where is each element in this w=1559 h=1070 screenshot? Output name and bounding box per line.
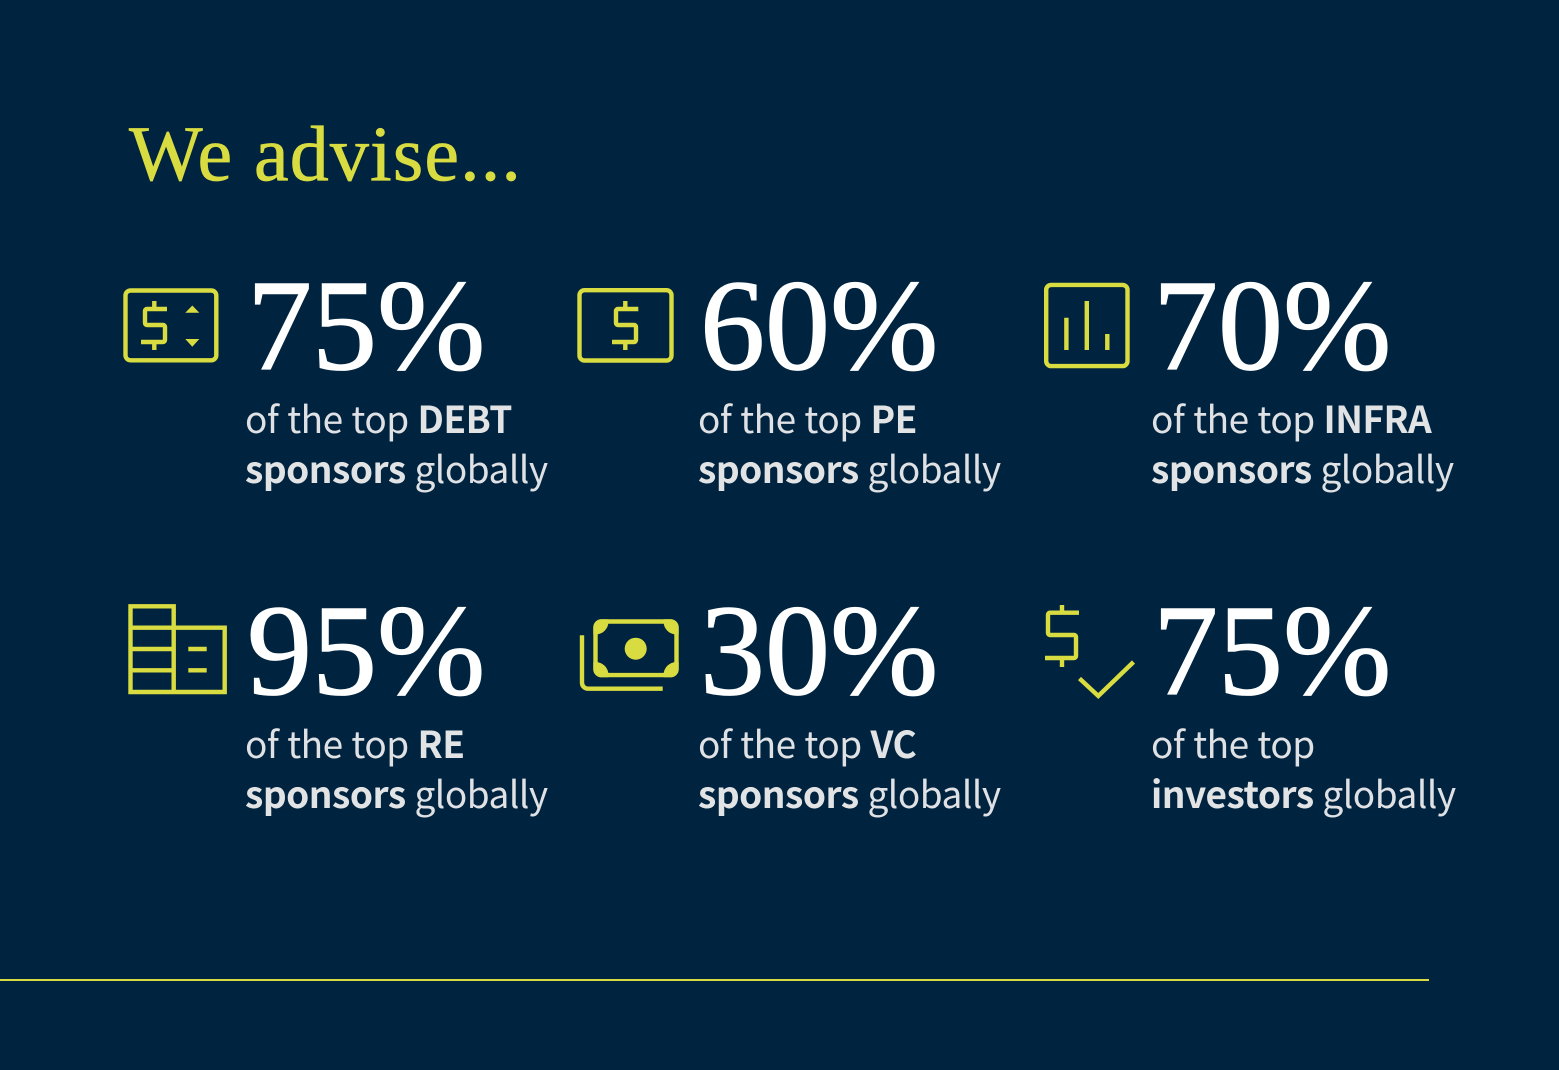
stat: 30% VC sponsors [698,579,1001,819]
stat description: PE: sponsors globally [698,440,1001,494]
icon: dollar with up and down arrows [126,290,216,360]
stat: 70% infra sponsors [1151,254,1454,494]
icon: dollar with check mark [1045,605,1134,696]
stat description: investors: of the top [1151,715,1315,769]
stat: 95% RE sponsors [245,579,548,819]
stat description: debt: of the top DEBT [245,390,512,444]
stat value: 70%: 70% [1153,254,1391,398]
icon: bar chart [1046,285,1128,366]
stat description: debt [245,390,548,494]
stat value: 75%: 75% [247,254,485,398]
stat value: 75%: 75% [1153,579,1391,723]
stat: 75% debt sponsors [245,254,548,494]
stat description: PE: of the top PE [698,390,917,444]
stat: 75% investors [1151,579,1456,819]
stat description: RE: of the top RE [245,715,464,769]
title: We advise... [129,110,522,197]
stat description: PE [698,390,1001,494]
stat value: 95%: 95% [247,579,485,723]
icon: buildings [130,606,225,692]
stat description: investors [1151,715,1456,819]
stat description: VC [698,715,1001,819]
stat description: VC: of the top VC [698,715,916,769]
stat description: RE [245,715,548,819]
stat description: RE: sponsors globally [245,765,548,819]
icon: dollar bill [580,290,672,360]
stat value: 30%: 30% [700,579,938,723]
stat description: VC: sponsors globally [698,765,1001,819]
stat description: infra: of the top INFRA [1151,390,1431,444]
stat value: 60%: 60% [700,254,938,398]
stat description: investors: investors globally [1151,765,1456,819]
stat description: infra: sponsors globally [1151,440,1454,494]
divider line [0,979,1429,981]
icon: banknotes [580,619,679,691]
stat description: debt: sponsors globally [245,440,548,494]
stat description: infra [1151,390,1454,494]
stat: 60% PE sponsors [698,254,1001,494]
